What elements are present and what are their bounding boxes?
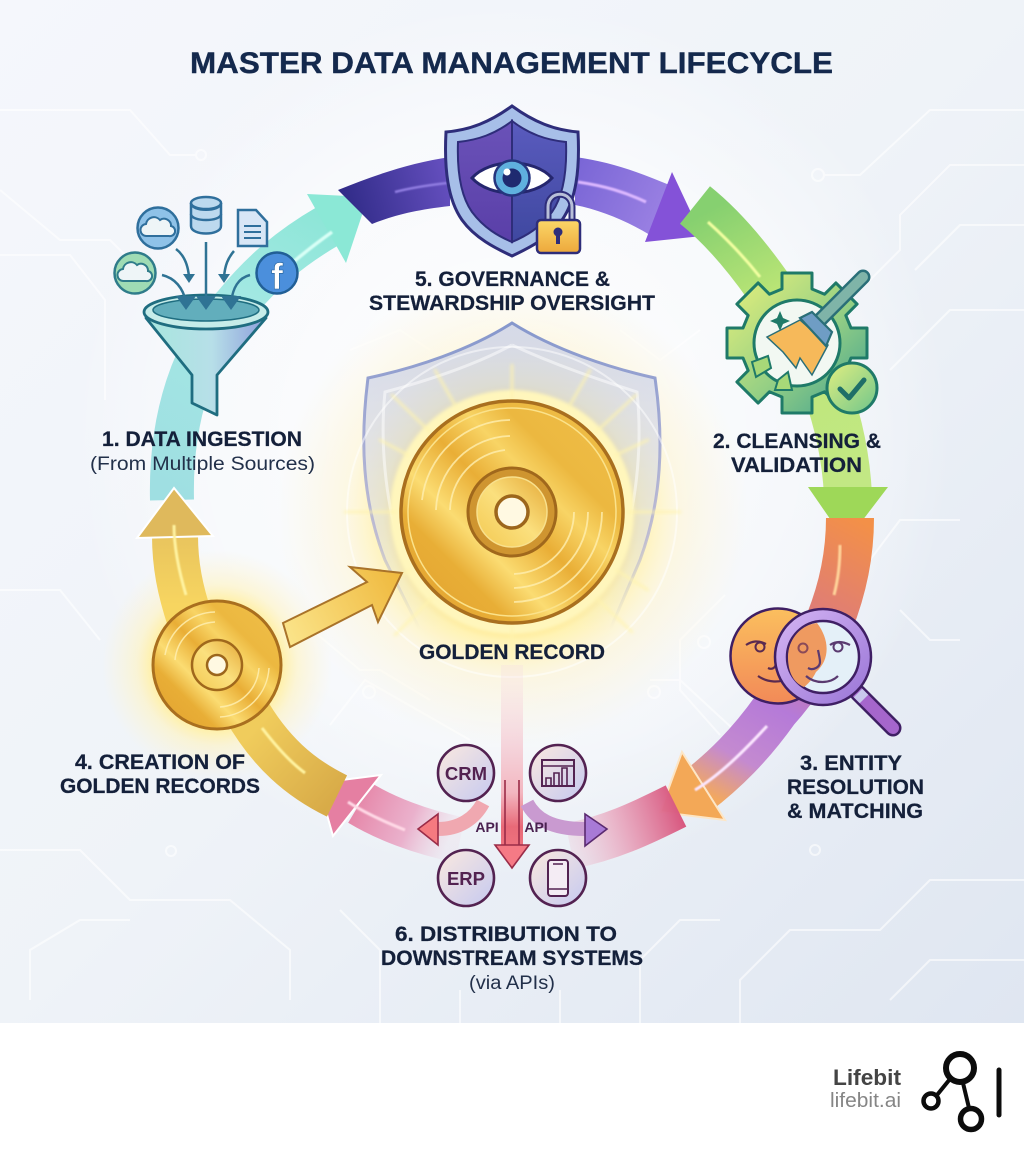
API label right: API: [524, 819, 548, 835]
label: step 5: [369, 268, 655, 315]
arrow 8: gold arc from distribution: [245, 708, 337, 796]
icon: facebook source: f: [271, 256, 284, 297]
lifebit wordmark: lifebit.ai: [830, 1090, 901, 1112]
rays around golden record: [345, 365, 680, 660]
icon: gear: [727, 273, 867, 413]
label: step 1: 1. DATA INGESTION: [102, 428, 302, 451]
title: MASTER DATA MANAGEMENT LIFECYCLE: [190, 47, 833, 80]
label: step 5: 5. GOVERNANCE &: [415, 268, 610, 291]
label: step 1: [90, 428, 315, 475]
icon: broom: [752, 277, 863, 390]
arrow 5: orange-purple arc: [660, 518, 850, 820]
arrow 4: green arc: [695, 205, 888, 542]
background shield behind golden record: [347, 323, 677, 677]
icon: blue cloud source: [138, 208, 178, 248]
halo around golden record: [390, 390, 634, 634]
label: step 6: (via APIs): [469, 973, 555, 994]
label: step 4: [60, 751, 260, 798]
footer panel: [0, 1023, 1024, 1154]
circuit pattern background: [0, 110, 1024, 1023]
icon: check badge: [827, 363, 877, 413]
arrow 10: gold arrow to golden record: [283, 567, 402, 647]
icon: faces and magnifier for entity resolution: [730, 608, 893, 728]
ERP node: [438, 850, 494, 906]
lifebit wordmark: [830, 1065, 902, 1112]
arrow 6: pink arc on the right: [570, 806, 676, 846]
small glow: [102, 550, 332, 780]
label: step 3: RESOLUTION: [787, 776, 924, 799]
lifebit wordmark: Lifebit: [833, 1065, 902, 1090]
CRM node: [438, 745, 494, 801]
golden record disc: [401, 401, 623, 623]
label: step 3: 3. ENTITY: [800, 752, 902, 775]
icon: data ingestion funnel with sources: [114, 197, 298, 415]
icon: governance shield with eye and lock: [446, 106, 580, 256]
center down arrow: [495, 665, 529, 868]
label: step 2: 2. CLEANSING &: [713, 430, 881, 453]
arrow 3: purple arc right of shield: [575, 157, 702, 242]
label: step 1: (From Multiple Sources): [90, 454, 315, 475]
label: step 4: 4. CREATION OF: [75, 751, 245, 774]
label: step 4: GOLDEN RECORDS: [60, 775, 260, 798]
label: step 2: [713, 430, 881, 477]
icon: cleansing gear with broom and check: [727, 273, 877, 413]
arrow 2: purple arc left of shield: [338, 157, 450, 224]
label: step 6: 6. DISTRIBUTION TO: [395, 923, 617, 946]
lifebit logo: [924, 1054, 999, 1130]
label: step 3: & MATCHING: [787, 800, 923, 823]
step 4 small golden disc: [153, 601, 281, 729]
dashboard node: [530, 745, 586, 801]
icon: magnifying glass: [775, 609, 893, 728]
ERP node: ERP: [447, 868, 485, 889]
label: step 2: VALIDATION: [731, 454, 862, 477]
right API arrow: [527, 803, 607, 846]
CRM node: CRM: [445, 763, 487, 784]
icon: funnel: [144, 295, 268, 415]
icon: inflow arrows: [162, 242, 250, 310]
golden record glow: [277, 277, 747, 747]
distribution hub with CRM ERP dashboard phone: [418, 665, 607, 906]
label: step 6: DOWNSTREAM SYSTEMS: [381, 947, 643, 970]
phone node: [530, 850, 586, 906]
icon: padlock: [537, 194, 580, 253]
icon: facebook source: [256, 252, 298, 297]
API label left: API: [475, 819, 499, 835]
icon: database source: [191, 197, 221, 234]
left API arrow: [418, 803, 483, 845]
label: step 6: [381, 923, 643, 994]
label: step 3: [787, 752, 924, 823]
icon: eye: [472, 160, 552, 196]
icon: green cloud source: [114, 252, 156, 294]
icon: document source: [238, 210, 267, 246]
arrow 7: pink arrow on the left: [318, 775, 460, 840]
arrow 9: gold arrow up to ingestion: [137, 488, 213, 620]
icon: left face: [730, 608, 826, 704]
arrow 1: teal arc to governance: [172, 194, 368, 500]
label: golden record: GOLDEN RECORD: [419, 641, 605, 664]
label: step 5: STEWARDSHIP OVERSIGHT: [369, 292, 655, 315]
